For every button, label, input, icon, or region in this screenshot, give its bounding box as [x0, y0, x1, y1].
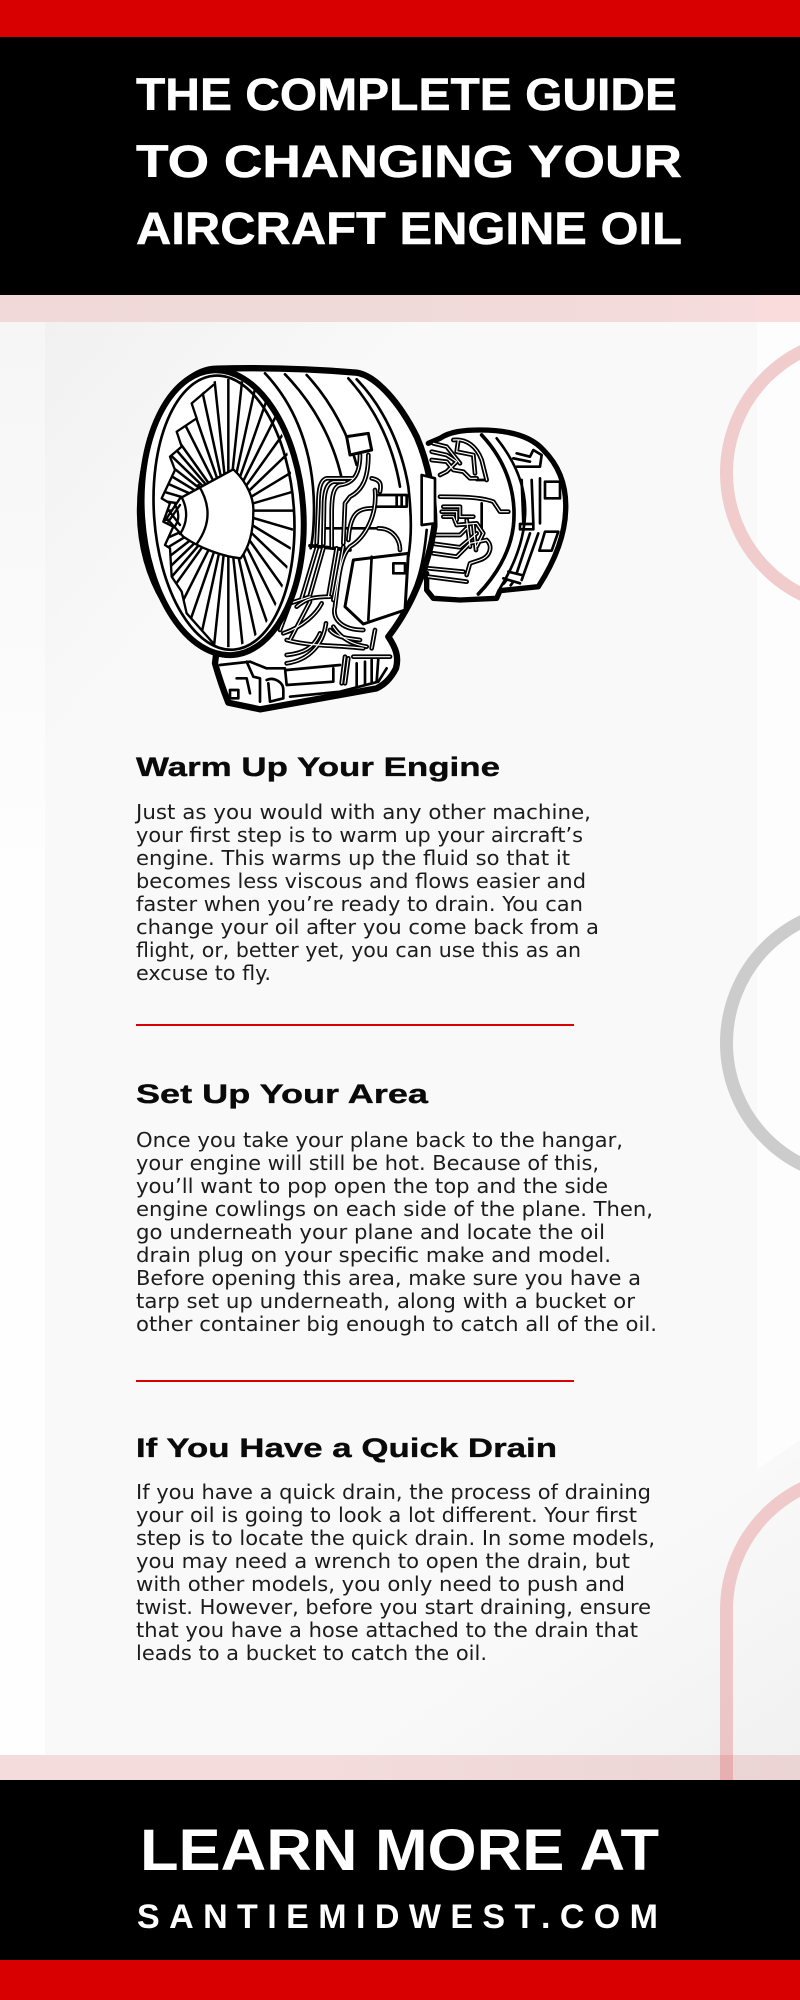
pink band bottom [0, 1755, 800, 1780]
call to action: LEARN MORE AT [140, 1818, 659, 1883]
panel: if you have a quick drain [136, 1433, 655, 1665]
fan blades [164, 378, 293, 648]
body text: engine cowlings on each side of the plane. Then, [136, 1197, 653, 1221]
body text: flight, or, better yet, you can use this as an [136, 938, 581, 962]
body text: becomes less viscous and flows easier and [136, 869, 586, 893]
pipes [280, 455, 400, 683]
decorative circle: pink [726, 338, 800, 608]
body text: If you have a quick drain, the process of draining [136, 1480, 651, 1504]
heading: Set Up Your Area [136, 1079, 429, 1109]
pink band top [0, 295, 800, 322]
title: AIRCRAFT ENGINE OIL [136, 203, 682, 254]
body text: your oil is going to look a lot different. Your first [136, 1503, 637, 1527]
body text: go underneath your plane and locate the oil [136, 1220, 605, 1244]
title: THE COMPLETE GUIDE [136, 69, 677, 120]
body text: other container big enough to catch all of the oil. [136, 1312, 657, 1336]
decorative arch: pink [726, 1474, 800, 1780]
body text: leads to a bucket to catch the oil. [136, 1641, 487, 1665]
rear engine section [423, 430, 566, 600]
body text: drain plug on your specific make and model. [136, 1243, 611, 1267]
bottom red bar [0, 1960, 800, 2000]
body text: tarp set up underneath, along with a bucket or [136, 1289, 636, 1313]
rear pipes [428, 440, 508, 582]
body text: change your oil after you come back from a [136, 915, 599, 939]
blade sawtooth edge [162, 385, 213, 643]
body text: twist. However, before you start draining, ensure [136, 1595, 651, 1619]
body text: Just as you would with any other machine, [134, 800, 591, 824]
neck bracket [422, 475, 435, 525]
body text: excuse to fly. [136, 961, 271, 985]
sensor box [347, 433, 372, 455]
body text: engine. This warms up the fluid so that it [136, 846, 570, 870]
website: SANTIEMIDWEST.COM [137, 1898, 658, 1936]
lower accessories [220, 658, 387, 702]
title [136, 69, 682, 254]
title: TO CHANGING YOUR [136, 136, 682, 187]
fan rim [132, 365, 313, 661]
body text: your first step is to warm up your aircraft’s [136, 823, 583, 847]
nacelle bands [265, 373, 427, 613]
nacelle body [140, 368, 434, 709]
body text: with other models, you only need to push and [136, 1572, 625, 1596]
gearbox [345, 553, 408, 624]
body text [134, 800, 599, 985]
top red bar [0, 0, 800, 37]
body text: Once you take your plane back to the hangar, [136, 1128, 623, 1152]
heading: Warm Up Your Engine [136, 752, 500, 782]
heading: If You Have a Quick Drain [136, 1433, 557, 1463]
panel: warm up your engine [134, 752, 599, 985]
accessory box and pipes [280, 433, 408, 683]
title banner [0, 37, 800, 295]
body text: you may need a wrench to open the drain, but [136, 1549, 630, 1573]
decorative circle: grey [726, 908, 800, 1178]
body text [136, 1480, 655, 1665]
body text: your engine will still be hot. Because of this, [136, 1151, 599, 1175]
body text: you’ll want to pop open the top and the side [136, 1174, 608, 1198]
body text [136, 1128, 657, 1336]
body text: Before opening this area, make sure you have a [136, 1266, 641, 1290]
spinner hub [167, 469, 253, 558]
body text: that you have a hose attached to the drain that [136, 1618, 638, 1642]
body text: step is to locate the quick drain. In some models, [136, 1526, 655, 1550]
panel: set up your area [136, 1079, 657, 1336]
footer banner [0, 1780, 800, 1960]
body text: faster when you’re ready to drain. You can [136, 892, 583, 916]
icon: jet engine [136, 365, 568, 712]
